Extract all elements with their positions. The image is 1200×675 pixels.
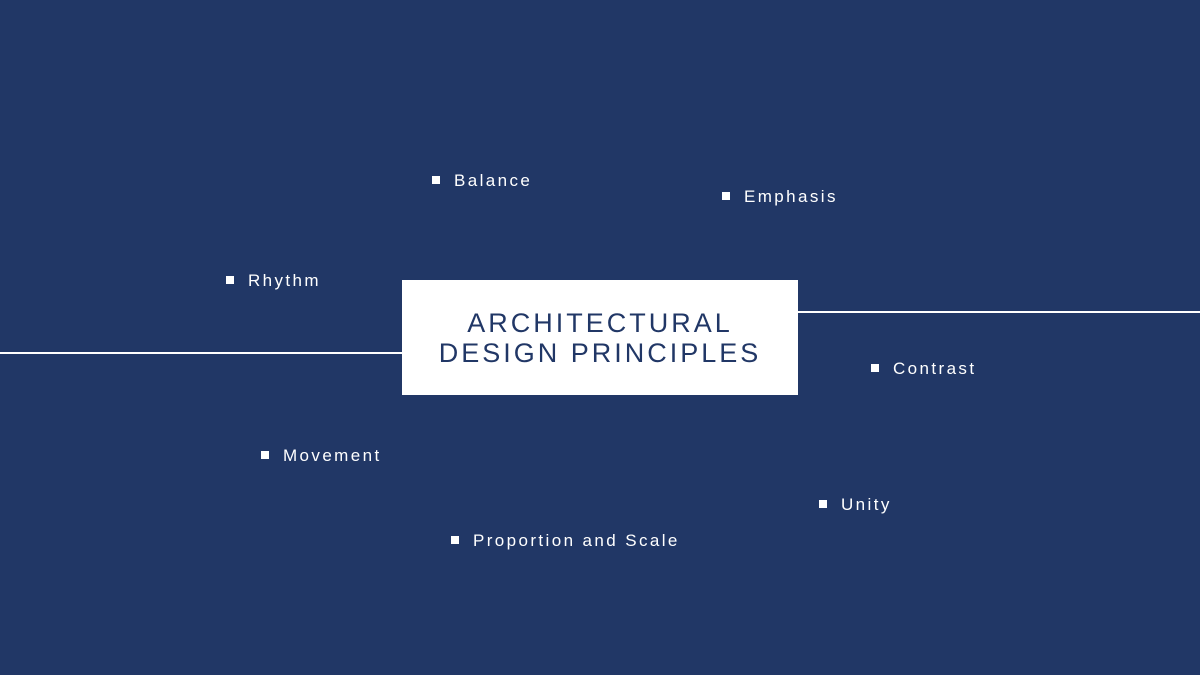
label: Rhythm: Rhythm: [248, 271, 321, 290]
label: Proportion and Scale: Proportion and Scale: [473, 531, 680, 550]
title box: [402, 280, 798, 395]
label: Emphasis: Emphasis: [744, 187, 838, 206]
label: Unity: Unity: [841, 495, 892, 514]
title: DESIGN PRINCIPLES: [439, 338, 761, 368]
label: Unity: [819, 495, 892, 514]
label: Balance: Balance: [454, 171, 532, 190]
label: Contrast: Contrast: [893, 359, 976, 378]
label: Movement: Movement: [283, 446, 382, 465]
title: ARCHITECTURAL: [467, 308, 733, 338]
title: [439, 308, 761, 368]
